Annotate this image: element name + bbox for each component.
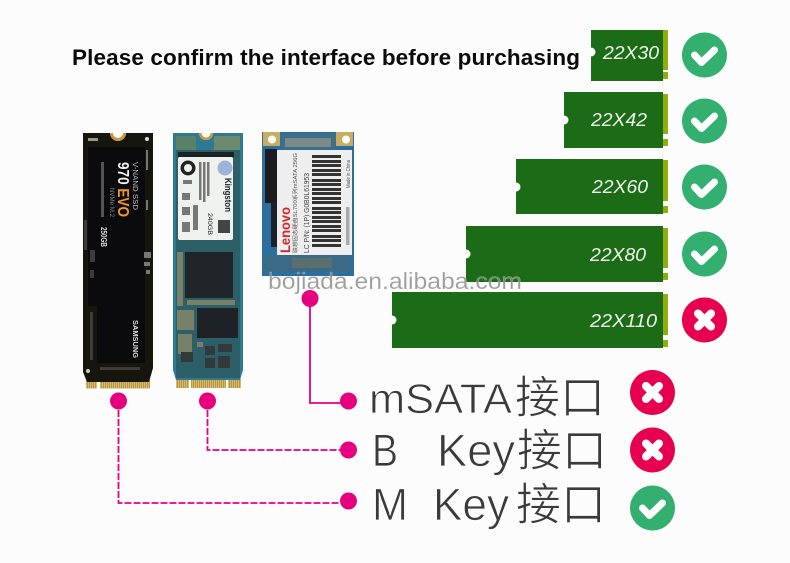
watermark: bojiada.en.alibaba.com: [268, 268, 522, 294]
panel: Samsung 970 EVO SSD: 250GB: [99, 227, 108, 247]
icon: cross 22X110: [682, 298, 727, 342]
panel: Lenovo mSATA SSD: 联想固态硬盘SL700系列mSATA 256G: [292, 153, 299, 253]
icon: check 22X30: [682, 32, 727, 78]
panel: size 22X30: [586, 30, 668, 81]
panel: Samsung 970 EVO SSD: [83, 133, 153, 389]
label: B Key: 接口: [517, 425, 607, 476]
barcode: [312, 155, 341, 247]
label: B Key: [372, 425, 607, 476]
label: M Key: M: [372, 479, 408, 530]
panel: Samsung 970 EVO SSD: NVMe M.2: [108, 188, 114, 218]
panel: Samsung 970 EVO SSD: SAMSUNG: [131, 320, 140, 358]
connector: mSATA: [302, 290, 357, 410]
icon: check 22X42: [682, 98, 727, 144]
panel: size 22X110: 22X110: [589, 311, 657, 331]
icon: cross mSATA: [630, 370, 675, 415]
label: M Key: Key: [433, 479, 509, 530]
icon: check M Key: [630, 486, 675, 530]
panel: size 22X80: 22X80: [589, 245, 646, 265]
label: B Key: B: [372, 425, 398, 476]
title: Please confirm the interface before purchasing: [72, 45, 580, 70]
panel: size 22X60: 22X60: [591, 177, 648, 197]
label: B Key: Key: [437, 425, 515, 476]
panel: Samsung 970 EVO SSD: 970 EVO: [114, 162, 131, 217]
panel: size 22X110: [388, 292, 668, 348]
panel: size 22X80: [462, 226, 668, 282]
panel: size 22X30: 22X30: [602, 43, 659, 63]
label: M Key: 接口: [516, 479, 606, 530]
panel: Lenovo mSATA SSD: [262, 132, 354, 276]
connector: M Key: [110, 392, 357, 510]
panel: Kingston B+M key SSD: 240GB: [206, 213, 213, 235]
label: mSATA: 接口: [515, 372, 605, 423]
label: mSATA: [369, 372, 605, 423]
panel: Samsung 970 EVO SSD: V-NAND SSD: [131, 162, 138, 210]
panel: Lenovo mSATA SSD: Lenovo: [277, 207, 293, 253]
icon: check 22X80: [682, 232, 727, 276]
panel: Lenovo mSATA SSD: LC P/N: (1P) G0B0L61953: [304, 173, 311, 253]
panel: Kingston B+M key SSD: [173, 133, 243, 388]
icon: check 22X60: [682, 164, 727, 210]
panel: Kingston B+M key SSD: Kingston: [223, 178, 233, 212]
icon: cross B Key: [630, 428, 675, 472]
panel: size 22X42: [560, 92, 668, 148]
panel: Lenovo mSATA SSD: Made in China: [346, 159, 352, 188]
panel: size 22X60: [512, 159, 668, 214]
label: M Key: [372, 479, 606, 530]
label: mSATA: mSATA: [369, 375, 512, 422]
panel: size 22X42: 22X42: [590, 110, 647, 130]
connector: B Key: [199, 392, 357, 458]
